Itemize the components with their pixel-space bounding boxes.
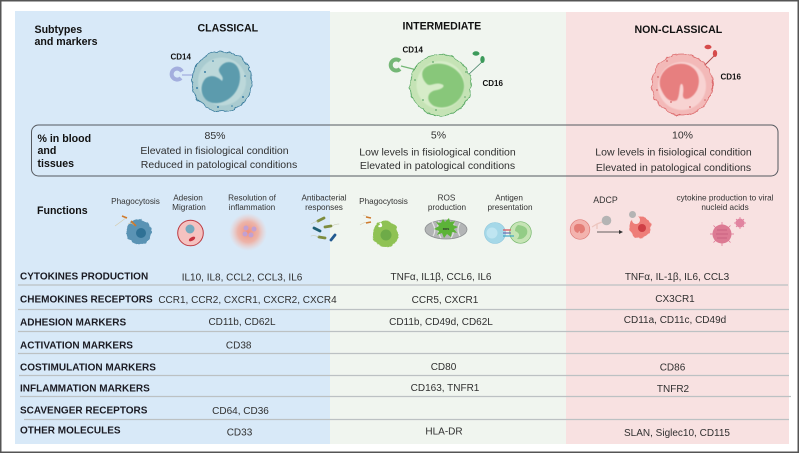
text: classical percentage: Elevated in fisiological condition bbox=[140, 145, 289, 157]
row: other molecules: HLA-DR bbox=[425, 426, 463, 438]
icon: phagocytosis intermediate bbox=[360, 215, 398, 247]
label: ROS production: production bbox=[428, 203, 467, 212]
label: ADCP: ADCP bbox=[593, 195, 618, 205]
row: adhesion markers: CD11b, CD49d, CD62L bbox=[389, 317, 493, 328]
row: chemokines receptors bbox=[20, 294, 695, 306]
heading: percent in blood and tissues: and bbox=[38, 145, 56, 157]
heading: percent in blood and tissues: tissues bbox=[38, 158, 74, 170]
row: inflammation markers bbox=[20, 383, 690, 395]
label: CD16 intermediate: CD16 bbox=[482, 79, 504, 88]
label: phagocytosis intermediate: Phagocytosis bbox=[359, 197, 408, 206]
label: resolution of inflammation: Resolution of bbox=[228, 194, 276, 202]
table rows: divider lines bbox=[18, 285, 791, 420]
row: cytokines production bbox=[20, 272, 730, 284]
icon: ADCP process bbox=[570, 211, 651, 239]
label: cytokine production to viral nucleid acids: nucleid acids bbox=[701, 203, 749, 212]
cell: classical monocyte with CD14 bbox=[172, 52, 252, 112]
label: adesion migration: Migration bbox=[172, 203, 206, 212]
row: chemokines receptors: CCR5, CXCR1 bbox=[412, 295, 479, 306]
row: chemokines receptors: CHEMOKINES RECEPTORS bbox=[20, 295, 153, 306]
row: adhesion markers: ADHESION MARKERS bbox=[20, 317, 126, 328]
text: intermediate percentage: 5% bbox=[431, 130, 446, 142]
icon: viruses bbox=[710, 217, 746, 246]
row: scavenger receptors: CD64, CD36 bbox=[212, 406, 269, 417]
heading: intermediate: INTERMEDIATE bbox=[402, 20, 481, 32]
row: other molecules: OTHER MOLECULES bbox=[20, 426, 121, 437]
row: inflammation markers: INFLAMMATION MARKERS bbox=[20, 384, 150, 395]
label: CD14 classical: CD14 bbox=[170, 52, 192, 62]
icon: adhesion migration bbox=[178, 220, 203, 246]
label: antigen presentation: Antigen bbox=[495, 194, 523, 202]
label: adesion migration: Adesion bbox=[173, 194, 203, 202]
icon: mitochondrion with ROS burst bbox=[425, 218, 467, 239]
row: costimulation markers: CD86 bbox=[660, 362, 686, 374]
panel: non-classical bbox=[566, 12, 789, 444]
heading: classical: CLASSICAL bbox=[198, 22, 259, 34]
row: costimulation markers: COSTIMULATION MARKERS bbox=[20, 363, 156, 374]
panel: classical bbox=[15, 11, 330, 444]
text: classical percentage: Reduced in patological conditions bbox=[141, 159, 297, 171]
row: activation markers: CD38 bbox=[226, 340, 252, 352]
row: costimulation markers: CD80 bbox=[431, 362, 457, 373]
text: non-classical percentage: Elevated in patological conditions bbox=[596, 162, 751, 174]
label: antibacterial responses: responses bbox=[305, 203, 343, 212]
icon: resolution of inflammation bbox=[229, 213, 267, 251]
row: cytokines production: IL10, IL8, CCL2, CCL3, IL6 bbox=[182, 272, 303, 284]
row: scavenger receptors bbox=[20, 405, 269, 417]
row: other molecules: CD33 bbox=[227, 428, 253, 438]
row: inflammation markers: TNFR2 bbox=[657, 384, 690, 395]
row: cytokines production: TNFα, IL-1β, IL6, CCL3 bbox=[625, 272, 730, 283]
panel: intermediate bbox=[330, 12, 566, 444]
row: scavenger receptors: SCAVENGER RECEPTORS bbox=[20, 405, 148, 416]
label: resolution of inflammation: inflammation bbox=[229, 203, 276, 212]
label: phagocytosis classical: Phagocytosis bbox=[111, 197, 160, 206]
icon: mitochondrion with ROS burst: ROS bbox=[443, 227, 449, 231]
cell: intermediate monocyte with CD14 and CD16 bbox=[391, 51, 485, 115]
label: antigen presentation: presentation bbox=[487, 203, 533, 212]
label: CD14 intermediate: CD14 bbox=[402, 46, 424, 54]
label: CD16 non-classical: CD16 bbox=[720, 72, 742, 82]
heading: subtypes and markers: Subtypes bbox=[34, 24, 82, 36]
row: other molecules: SLAN, Siglec10, CD115 bbox=[624, 428, 730, 439]
row: inflammation markers: CD163, TNFR1 bbox=[411, 383, 480, 394]
text: classical percentage: 85% bbox=[204, 130, 226, 142]
row: activation markers bbox=[20, 340, 252, 352]
row: cytokines production: CYTOKINES PRODUCTION bbox=[20, 272, 148, 283]
row: adhesion markers: CD11b, CD62L bbox=[208, 317, 276, 328]
heading: subtypes and markers: and markers bbox=[34, 36, 98, 48]
label: ROS production: ROS bbox=[438, 194, 455, 202]
heading: percent in blood and tissues: % in blood bbox=[38, 133, 91, 145]
heading: non-classical: NON-CLASSICAL bbox=[634, 24, 723, 36]
heading: functions: Functions bbox=[37, 205, 88, 217]
box: percent in blood and tissues bbox=[32, 125, 778, 176]
text: intermediate percentage: Low levels in fisiological condition bbox=[359, 146, 516, 158]
label: cytokine production to viral nucleid acids: cytokine production to viral bbox=[677, 194, 773, 202]
text: non-classical percentage: 10% bbox=[672, 130, 693, 142]
row: activation markers: ACTIVATION MARKERS bbox=[20, 340, 133, 351]
row: chemokines receptors: CX3CR1 bbox=[655, 294, 695, 305]
row: costimulation markers bbox=[20, 362, 686, 374]
text: non-classical percentage: Low levels in fisiological condition bbox=[595, 146, 752, 158]
icon: antigen presentation bbox=[484, 222, 531, 244]
cell: non-classical monocyte with CD16 bbox=[652, 45, 717, 115]
row: other molecules bbox=[20, 426, 730, 439]
row: cytokines production: TNFα, IL1β, CCL6, IL6 bbox=[390, 272, 492, 283]
icon: phagocytosis classical bbox=[115, 216, 152, 244]
row: adhesion markers: CD11a, CD11c, CD49d bbox=[624, 315, 726, 326]
row: adhesion markers bbox=[20, 315, 726, 328]
label: antibacterial responses: Antibacterial bbox=[301, 194, 347, 202]
icon: bacteria bbox=[311, 218, 339, 240]
text: intermediate percentage: Elevated in patological conditions bbox=[360, 160, 515, 172]
row: chemokines receptors: CCR1, CCR2, CXCR1, CXCR2, CXCR4 bbox=[158, 295, 337, 306]
